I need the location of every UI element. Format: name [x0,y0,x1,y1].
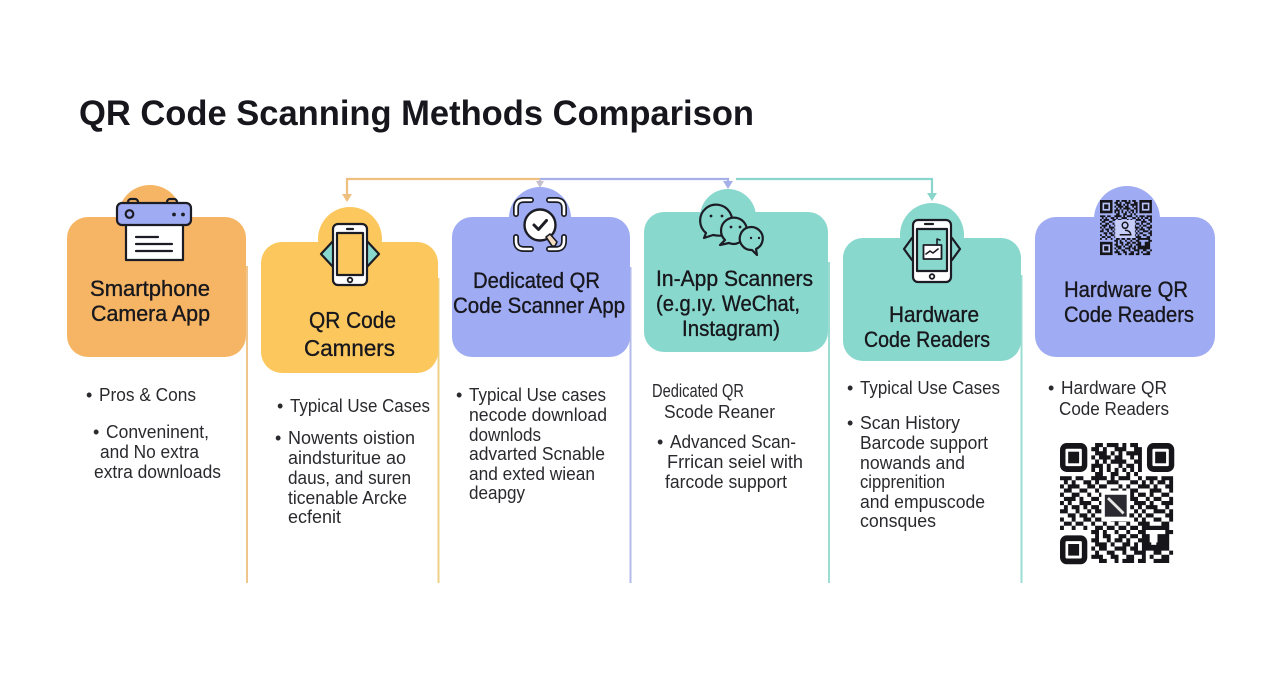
icon: phone with side arrows [321,224,379,285]
text block: qr code camners details: daus, and suren [288,468,411,488]
text block: hardware qr reader details: Hardware QR [1061,378,1167,398]
text block: in-app scanner details: farcode support [665,472,787,492]
text block: dedicated scanner details [456,385,607,503]
text block: dedicated scanner details: advarted Scnable [469,444,605,464]
icon: printer-like camera app [117,199,191,260]
text block: hardware code reader details: • [847,378,853,398]
text block: hardware code reader details: Barcode support [860,433,988,453]
heading: hardware code readers: Hardware [889,302,979,327]
text block: hardware qr reader details: Code Readers [1059,399,1169,419]
text block: qr code camners details: ticenable Arcke [288,488,407,508]
text block: in-app scanner details: Scode Reaner [664,402,775,422]
text block: in-app scanner details: • [657,432,663,452]
heading: smartphone camera app [90,276,210,326]
heading: in-app scanners: In-App Scanners [656,266,813,291]
text block: in-app scanner details: Dedicated QR [652,381,744,401]
text block: in-app scanner details: Advanced Scan- [670,432,796,452]
heading: dedicated qr code scanner app: Dedicated QR [473,268,600,293]
text block: hardware code reader details [847,378,1000,531]
text block: hardware code reader details: and empuscode [860,492,985,512]
text block: in-app scanner details [652,381,803,492]
heading: hardware qr code readers: Hardware QR [1064,277,1188,302]
icon: small qr code [1100,200,1152,255]
text block: hardware code reader details: Typical Use Cases [860,378,1000,398]
column divider lines [247,262,1022,583]
heading: hardware qr code readers: Code Readers [1064,302,1194,327]
icon: phone with chart [904,220,960,282]
text block: smartphone camera app details [86,385,221,482]
text block: qr code camners details [275,396,430,527]
heading: in-app scanners: Instagram) [682,316,780,341]
text block: qr code camners details: ecfenit [288,507,341,527]
text block: hardware code reader details: nowands and [860,453,965,473]
heading: smartphone camera app: Smartphone [90,276,210,301]
qr code graphic [1060,443,1173,563]
heading: in-app scanners [656,266,813,341]
text block: qr code camners details: • [275,428,281,448]
panel: hardware code readers [843,203,1021,361]
connector arrows [342,179,937,202]
text block: hardware code reader details: Scan History [860,413,960,433]
text block: hardware code reader details: consques [860,511,936,531]
text block: hardware code reader details: • [847,413,853,433]
text block: qr code camners details: Typical Use Cases [290,396,430,416]
icon: chat bubbles [700,205,763,255]
heading: qr code camners [304,307,396,361]
title: QR Code Scanning Methods Comparison [79,94,754,133]
text block: qr code camners details: aindsturitue ao [288,448,406,468]
text block: dedicated scanner details: • [456,385,462,405]
heading: dedicated qr code scanner app: Code Scanner App [453,293,625,318]
text block: dedicated scanner details: Typical Use cases [469,385,606,405]
text block: smartphone camera app details: Conveninent, [106,422,209,442]
icon: scan frame with check [516,200,564,249]
text block: smartphone camera app details: Pros & Cons [99,385,196,405]
heading: dedicated qr code scanner app [453,268,625,318]
heading: hardware qr code readers [1064,277,1194,327]
text block: dedicated scanner details: deapgy [469,483,525,503]
text block: dedicated scanner details: downlods [469,425,541,445]
text block: hardware code reader details: cipprenition [860,472,945,492]
heading: qr code camners: Camners [304,335,395,361]
text block: hardware qr reader details: • [1048,378,1054,398]
heading: in-app scanners: (e.g.ıy. WeChat, [656,291,800,316]
heading: qr code camners: QR Code [309,307,396,333]
text block: dedicated scanner details: necode download [469,405,607,425]
panel: qr code camners [261,207,438,373]
heading: smartphone camera app: Camera App [91,301,210,326]
text block: dedicated scanner details: and exted wiean [469,464,595,484]
text block: smartphone camera app details: and No extra [100,442,200,462]
panel: hardware qr code readers [1035,186,1215,357]
text block: smartphone camera app details: extra downloads [94,462,221,482]
text block: qr code camners details: Nowents oistion [288,428,415,448]
heading: hardware code readers: Code Readers [864,327,990,352]
text block: in-app scanner details: Frrican seiel with [667,452,803,472]
text block: smartphone camera app details: • [86,385,92,405]
heading: hardware code readers [864,302,990,352]
text block: hardware qr reader details [1048,378,1169,419]
text block: qr code camners details: • [277,396,283,416]
panel: smartphone camera app [67,185,246,357]
text block: smartphone camera app details: • [93,422,99,442]
panel: in-app scanners [644,189,828,352]
panel: dedicated qr code scanner app [452,187,630,357]
